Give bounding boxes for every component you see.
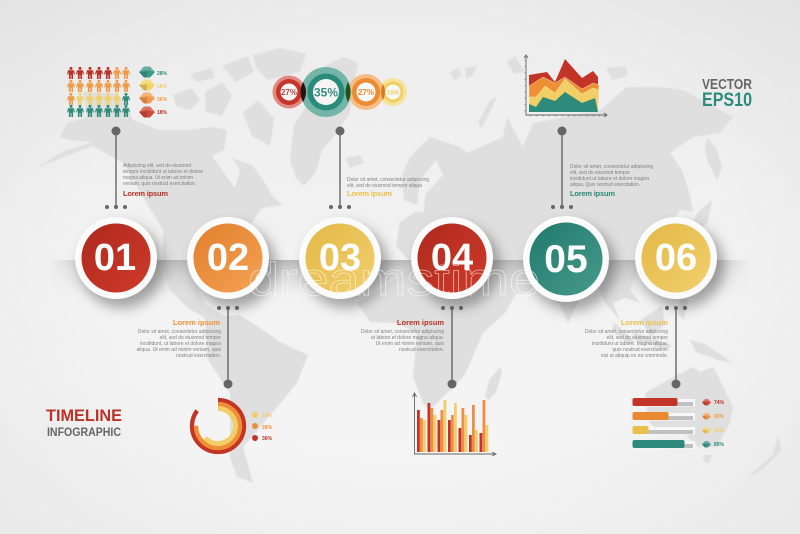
step 06 badge: 06: [655, 237, 697, 279]
ring chart legend: 36%: [262, 436, 273, 442]
step 01 connector: [105, 126, 127, 209]
ring chart legend: [252, 412, 273, 442]
text block 02: incididunt, ut labore et dolore magna: [140, 341, 221, 347]
world map: [37, 48, 782, 483]
bubble chart: 15%: [387, 90, 400, 96]
text block 05: Dolor sit amet, consectetur adipiscing: [570, 164, 653, 170]
text block 04: Ut enim ad minim veniam, quis: [376, 341, 444, 347]
text block 03: Lorem ipsum: [347, 189, 392, 198]
text block 06: Lorem ipsum: [621, 318, 668, 327]
title: timeline infographic: [46, 406, 122, 439]
step 05 badge: [523, 216, 616, 311]
pictogram legend: [139, 66, 168, 118]
text block 03: Dolor sit amet, consectetur adipiscing: [347, 177, 429, 183]
progress bars legend: [702, 399, 725, 448]
step 02 connector: [217, 306, 239, 388]
pictogram legend: 18%: [157, 84, 168, 90]
title: vector eps10: EPS10: [702, 90, 752, 111]
text block 06: [585, 318, 668, 359]
timeline band: [56, 260, 744, 288]
text block 04: nostrud exercitation.: [399, 347, 444, 353]
pictogram legend: 18%: [157, 110, 168, 116]
progress bars legend: 65%: [714, 414, 725, 420]
text block 06: nisi ut aliquip ex ea commodo.: [601, 353, 668, 359]
text block 02: Dolor sit amet, consectetur adipiscing: [138, 329, 221, 335]
text block 04: Lorem ipsum: [397, 318, 444, 327]
text block 04: Dolor sit amet, consectetur adipiscing: [361, 329, 444, 335]
text block 06: incididunt ut labore. Magna aliqua.: [592, 341, 668, 347]
step 05 connector: [551, 126, 573, 209]
text block 03: [347, 177, 429, 198]
bubble chart: [272, 67, 407, 117]
step 02 badge: [187, 217, 276, 308]
text block 06: Dolor sit amet, consectetur adipiscing: [585, 329, 668, 335]
text block 05: incididunt ut labore et dolore magna: [570, 176, 649, 182]
text block 03: elit, sed do eiusmod tempor aliqua: [347, 183, 422, 189]
title: timeline infographic: INFOGRAPHIC: [47, 425, 121, 439]
text block 02: nostrud exercitation.: [176, 353, 221, 359]
ring chart legend: 26%: [262, 425, 273, 431]
step 04 badge: [411, 217, 500, 308]
step 06 connector: [665, 306, 687, 388]
step 02 badge: 02: [207, 237, 249, 279]
text block 06: elit, sed do eiusmod tempor: [607, 335, 668, 341]
text block 01: [123, 163, 203, 198]
progress bars: [632, 398, 695, 448]
text block 02: Lorem ipsum: [173, 318, 220, 327]
step 04 badge: 04: [431, 237, 473, 279]
step 06 badge: [635, 217, 724, 308]
watermark: dreamstime: [248, 253, 540, 305]
pictogram legend: 28%: [157, 71, 168, 77]
text block 02: elit, sed do eiusmod tempor: [160, 335, 221, 341]
progress bars legend: 74%: [714, 400, 725, 406]
text block 05: elit, sed do eiusmod tempor: [570, 170, 630, 176]
text block 04: [361, 318, 444, 353]
bubble chart: 27%: [281, 88, 297, 97]
text block 04: ut labore et dolore magna aliqua.: [371, 335, 444, 341]
text block 01: magna aliqua. Ut enim ad minim: [123, 175, 193, 181]
bubble chart: 27%: [358, 88, 374, 97]
progress bars legend: 15%: [714, 428, 725, 434]
text block 01: Lorem ipsum: [123, 189, 168, 198]
step 03 badge: 03: [319, 237, 361, 279]
bubble chart: 35%: [314, 86, 338, 100]
text block 02: aliqua. Ut enim ad minim veniam, quis: [137, 347, 221, 353]
text block 02: [137, 318, 221, 359]
text block 01: Adipiscing elit, sed do eiusmod: [123, 163, 191, 169]
pictogram legend: 36%: [157, 97, 168, 103]
text block 05: Lorem ipsum: [570, 189, 615, 198]
ring chart legend: 16%: [262, 413, 273, 419]
step 01 badge: 01: [94, 237, 136, 279]
progress bars legend: 85%: [714, 442, 725, 448]
pictogram chart: [67, 67, 130, 117]
text block 05: aliqua. Quis nostrud exercitation.: [570, 182, 640, 188]
step 03 connector: [329, 126, 351, 209]
text block 01: veniam, quis nostrud exercitation.: [123, 181, 196, 187]
text block 05: [570, 164, 653, 198]
text block 01: tempor incididunt ut labore et dolore: [123, 169, 203, 175]
text block 06: quis nostrud exercitation.: [612, 347, 668, 353]
area chart: [524, 55, 607, 117]
ring chart: [192, 400, 244, 452]
title: vector eps10: [702, 77, 752, 111]
bar chart: [412, 393, 496, 456]
title: timeline infographic: TIMELINE: [46, 406, 122, 425]
step 05 badge: 05: [544, 238, 588, 281]
step 03 badge: [299, 217, 388, 308]
title: vector eps10: VECTOR: [702, 77, 752, 93]
step 01 badge: [75, 217, 164, 308]
step 04 connector: [441, 306, 463, 388]
